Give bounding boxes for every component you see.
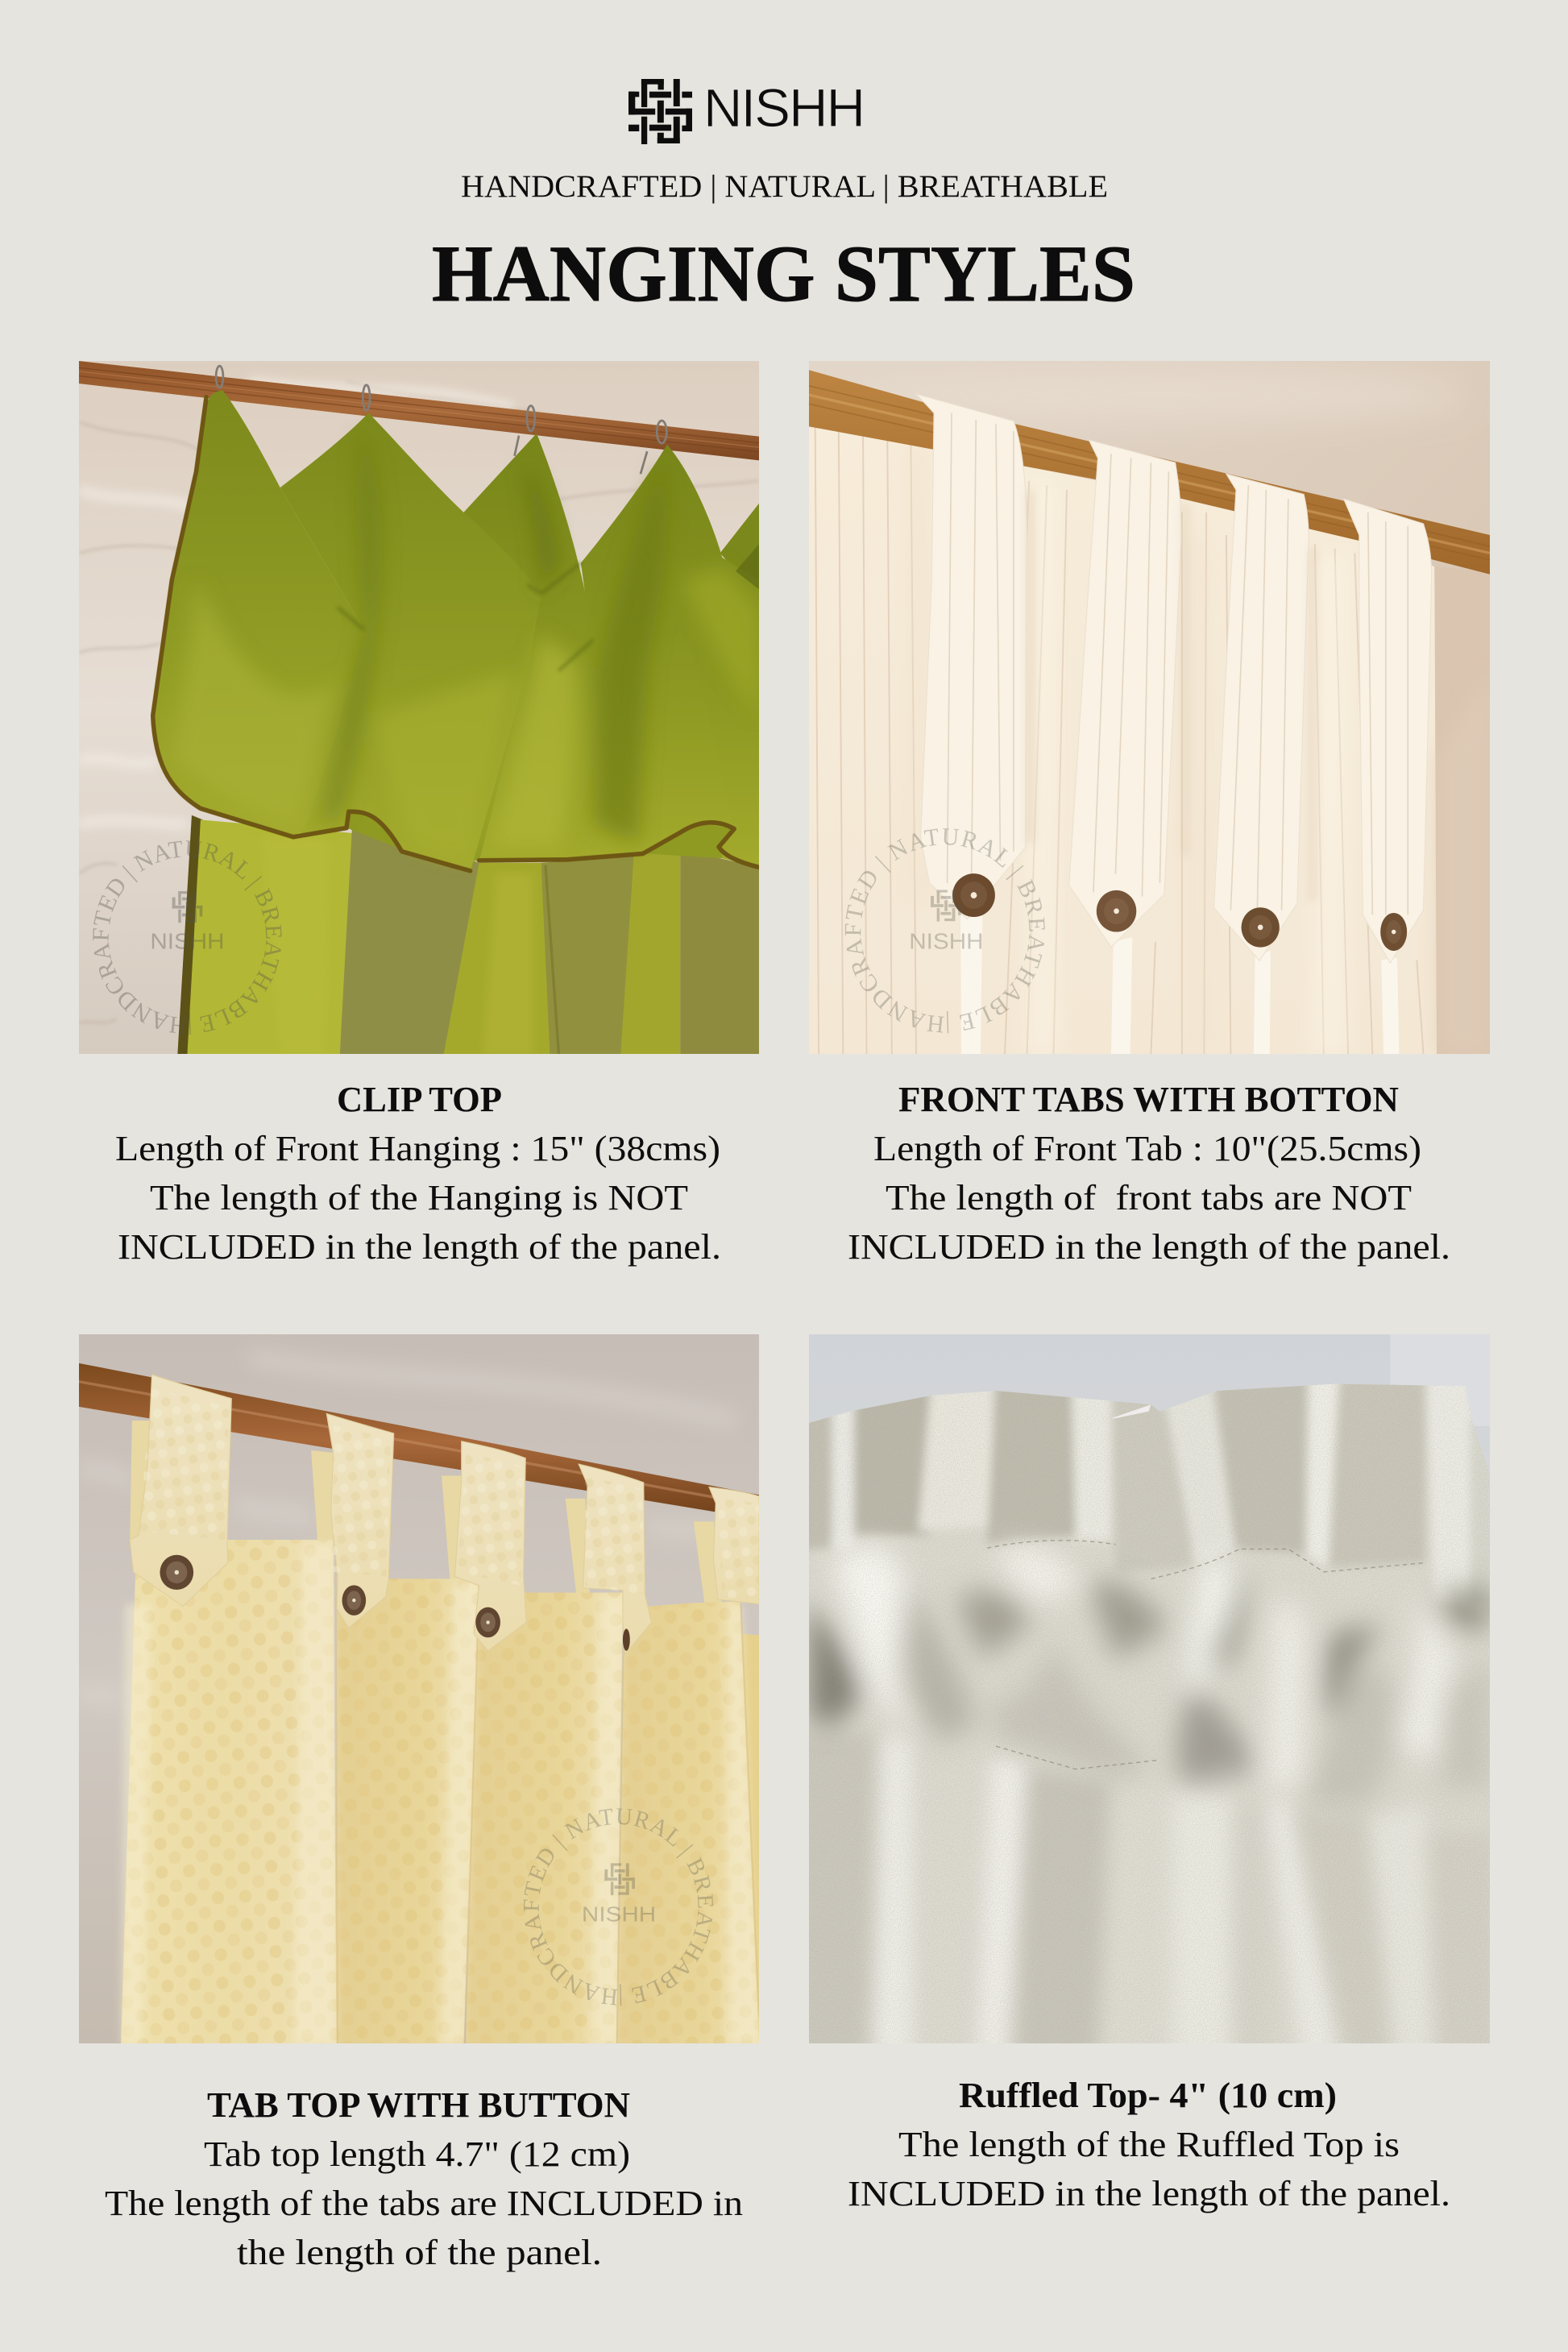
- photo: green clip top curtain: [79, 361, 759, 1054]
- watermark: HANDCRAFTED | NATURAL | BREATHABLE |: [524, 1808, 714, 2006]
- header stripes: [809, 1384, 1472, 1602]
- buttons: [160, 1555, 630, 1651]
- body stripes: [815, 426, 1424, 1054]
- panel: tab top with button: [79, 1334, 759, 2272]
- valance flaps: [152, 390, 759, 872]
- curtain rod: [79, 1363, 759, 1519]
- front tabs: [130, 1375, 759, 1654]
- tab shadows: [1027, 490, 1316, 901]
- fabric: [792, 1375, 1496, 2063]
- piping edges: [153, 397, 759, 871]
- caption: tab top with button: The length of the tabs are INCLUDED in: [105, 2184, 743, 2223]
- hooks: [216, 366, 666, 474]
- fold shading: [174, 431, 759, 856]
- backing fill between flaps: [300, 580, 759, 867]
- caption: clip top: The length of the Hanging is NOT: [150, 1178, 688, 1217]
- panels of curtain: [121, 1540, 759, 2043]
- stitch lines: [987, 1541, 1425, 1769]
- fold top edge highlight: [1111, 1404, 1151, 1418]
- caption: clip top: INCLUDED in the length of the panel.: [118, 1227, 721, 1267]
- panel: ruffled top: [792, 1334, 1496, 2213]
- title: HANGING STYLES: [432, 229, 1135, 318]
- caption: front tabs with botton: INCLUDED in the length of the panel.: [848, 1227, 1450, 1267]
- gathered folds: [809, 1545, 1490, 1806]
- caption: tab top with button: [105, 2085, 743, 2272]
- caption: clip top: Length of Front Hanging : 15" (38cms): [115, 1129, 720, 1168]
- caption: front tabs with botton: The length of front tabs are NOT: [886, 1178, 1412, 1217]
- weave texture: [809, 1375, 1490, 2043]
- watermark: NISHH: [909, 928, 984, 953]
- photo: yellow tab top curtain: [79, 1334, 759, 2043]
- caption: front tabs with botton: FRONT TABS WITH BOTTON: [898, 1080, 1399, 1119]
- caption: clip top: [115, 1080, 721, 1267]
- header: logo, tagline and title: [432, 78, 1135, 318]
- caption: ruffled top: INCLUDED in the length of the panel.: [848, 2174, 1450, 2213]
- buttons: [952, 873, 1407, 951]
- curtain rod: [809, 370, 1490, 575]
- back tabs: [130, 1421, 722, 1604]
- icon: knot mark: [628, 79, 692, 144]
- wordmark: NISHH: [703, 78, 865, 139]
- lower stripes: [792, 1732, 1496, 2063]
- panel: front tabs with button: [809, 361, 1490, 1267]
- logo: NISHH knot mark and wordmark: [628, 78, 865, 144]
- tabs: [916, 394, 1432, 963]
- caption: clip top: CLIP TOP: [337, 1080, 502, 1119]
- caption: front tabs with botton: [848, 1080, 1450, 1267]
- caption: ruffled top: Ruffled Top- 4" (10 cm): [959, 2076, 1337, 2115]
- tagline: HANDCRAFTED | NATURAL | BREATHABLE: [461, 169, 1108, 204]
- caption: tab top with button: Tab top length 4.7" (12 cm): [204, 2134, 630, 2174]
- panel: clip top: [79, 361, 759, 1267]
- watermark: NISHH: [150, 928, 225, 953]
- curtain rod: [79, 361, 759, 460]
- photo: cream front tabs curtain: [809, 361, 1490, 1054]
- caption: ruffled top: [848, 2076, 1450, 2213]
- watermark: NISHH: [582, 1903, 656, 1927]
- watermark: HANDCRAFTED | NATURAL | BREATHABLE |: [93, 840, 282, 1035]
- caption: front tabs with botton: Length of Front Tab : 10"(25.5cms): [873, 1129, 1421, 1168]
- caption: ruffled top: The length of the Ruffled Top is: [898, 2125, 1400, 2164]
- caption: tab top with button: the length of the panel.: [237, 2233, 602, 2272]
- caption: tab top with button: TAB TOP WITH BUTTON: [207, 2085, 630, 2125]
- curtain body: [809, 422, 1439, 1054]
- lower curtain panels: [177, 808, 759, 1054]
- narrow white strips: [960, 911, 1399, 1054]
- photo: grey striped ruffled top curtain: [809, 1334, 1490, 2043]
- watermark: HANDCRAFTED | NATURAL | BREATHABLE |: [844, 828, 1045, 1033]
